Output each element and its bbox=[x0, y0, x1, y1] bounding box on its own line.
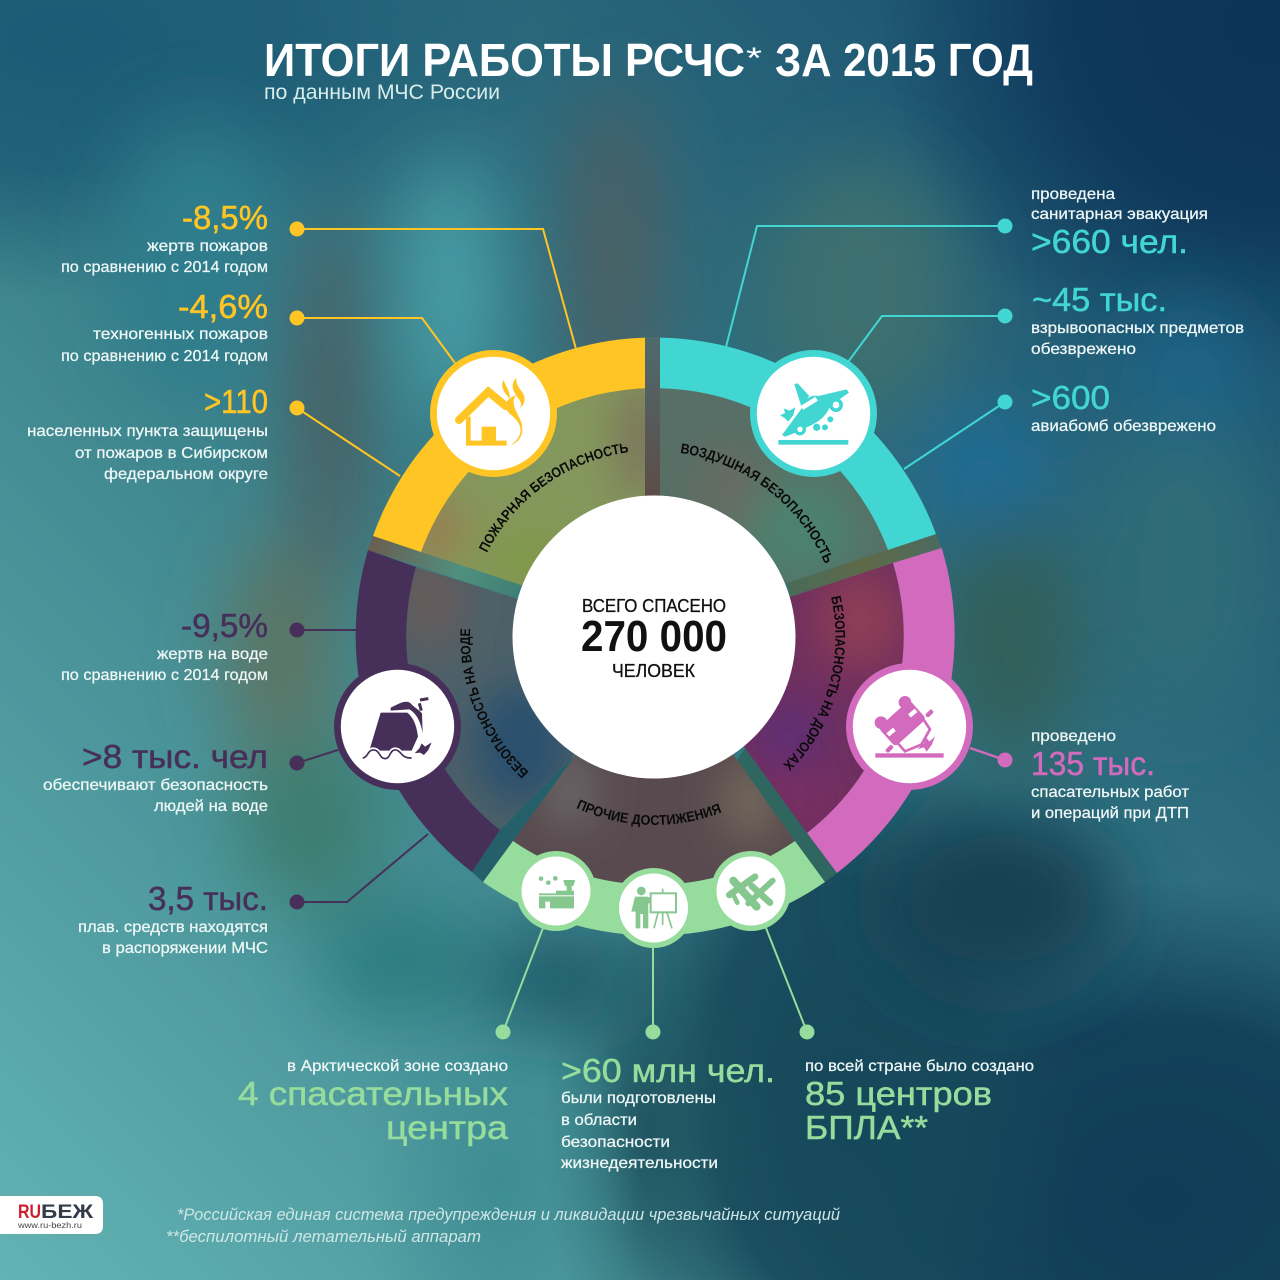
subtitle: по данным МЧС России bbox=[264, 81, 500, 104]
curved label: ВОЗДУШНАЯ БЕЗОПАСНОСТЬ bbox=[680, 444, 832, 563]
text block: UAV centres: по всей стране было создано bbox=[805, 1058, 1034, 1075]
text block: road stats bbox=[1031, 728, 1190, 822]
footnotes bbox=[166, 1205, 841, 1246]
logo: RUБЕЖ: www.ru-bezh.ru bbox=[17, 1220, 82, 1230]
text block: air stats: >600 bbox=[1031, 379, 1110, 416]
logo: RUБЕЖ: RU bbox=[18, 1202, 41, 1223]
icon: crashing plane bbox=[750, 350, 877, 477]
text block: people trained bbox=[561, 1052, 775, 1172]
sector tint: road safety bbox=[744, 563, 904, 833]
gap between road and other sectors bbox=[737, 748, 837, 882]
text block: people trained: жизнедеятельности bbox=[561, 1155, 718, 1172]
text block: road stats: 135 тыс. bbox=[1031, 745, 1155, 782]
leader dots: other bbox=[496, 1024, 814, 1040]
icon: ship and iceberg bbox=[334, 663, 461, 790]
title bbox=[264, 34, 1033, 86]
leader lines: water bbox=[297, 630, 428, 902]
centre circle: total rescued: 270 000 bbox=[581, 612, 727, 661]
footnotes: *Российская единая система предупреждения и ликвидации чрезвычайных ситуаций bbox=[177, 1205, 841, 1224]
icon: overturned car bbox=[846, 663, 973, 790]
text block: air stats: обезврежено bbox=[1031, 341, 1136, 358]
curved label: БЕЗОПАСНОСТЬ НА ДОРОГАХ bbox=[783, 596, 846, 771]
text block: water stats: в распоряжении МЧС bbox=[102, 940, 268, 957]
text block: arctic centres: 4 спасательных bbox=[238, 1075, 509, 1112]
text block: fire stats: по сравнению с 2014 годом bbox=[61, 348, 268, 365]
text block: water stats: 3,5 тыс. bbox=[148, 880, 268, 917]
leader line and dot: roads bbox=[970, 748, 1012, 768]
panel: road safety bbox=[783, 548, 973, 873]
panel: water safety bbox=[334, 550, 528, 872]
centre circle: total rescued: ВСЕГО СПАСЕНО bbox=[582, 596, 726, 616]
text block: people trained: >60 млн чел. bbox=[561, 1052, 775, 1089]
text block: fire stats: федеральном округе bbox=[104, 466, 268, 483]
centre circle: total rescued bbox=[512, 496, 796, 778]
text block: fire stats: по сравнению с 2014 годом bbox=[61, 259, 268, 276]
text block: fire stats: от пожаров в Сибирском bbox=[75, 445, 268, 462]
text block: fire stats bbox=[27, 199, 268, 483]
text block: people trained: безопасности bbox=[561, 1134, 670, 1151]
leader dots: air bbox=[998, 218, 1012, 410]
title: * bbox=[746, 42, 762, 75]
leader lines: fire bbox=[297, 229, 576, 476]
gap between fire and water sectors bbox=[368, 536, 521, 598]
curved label: ПОЖАРНАЯ БЕЗОПАСНОСТЬ bbox=[478, 444, 628, 552]
text block: fire stats: населенных пункта защищены bbox=[27, 423, 268, 440]
text block: road stats: проведено bbox=[1031, 728, 1116, 745]
leader dots: fire bbox=[290, 222, 304, 416]
text block: water stats: обеспечивают безопасность bbox=[43, 777, 268, 794]
text block: water stats bbox=[43, 607, 268, 957]
panel: air safety bbox=[660, 338, 936, 563]
text block: UAV centres bbox=[805, 1058, 1034, 1146]
icon: instructor at easel bbox=[614, 868, 694, 948]
text block: air stats: авиабомб обезврежено bbox=[1031, 418, 1216, 435]
centre circle: total rescued: ЧЕЛОВЕК bbox=[612, 661, 695, 681]
title: ЗА 2015 ГОД bbox=[775, 34, 1033, 86]
text block: fire stats: >110 bbox=[204, 383, 268, 420]
icon: drones bbox=[711, 851, 791, 931]
sector tint: water safety bbox=[406, 567, 575, 830]
band bbox=[373, 338, 645, 552]
band bbox=[483, 841, 825, 936]
text block: fire stats: -4,6% bbox=[178, 288, 268, 325]
logo: RUБЕЖ bbox=[0, 1196, 103, 1234]
band bbox=[807, 548, 955, 873]
curved label: БЕЗОПАСНОСТЬ НА ВОДЕ bbox=[460, 628, 528, 778]
text block: road stats: спасательных работ bbox=[1031, 784, 1190, 801]
text block: air stats: ~45 тыс. bbox=[1032, 281, 1167, 318]
panel: fire safety bbox=[373, 338, 645, 552]
band bbox=[356, 550, 500, 872]
text block: water stats: по сравнению с 2014 годом bbox=[61, 667, 268, 684]
logo: RUБЕЖ: БЕЖ bbox=[41, 1202, 94, 1223]
icon: arctic rescue centre bbox=[516, 851, 596, 931]
text block: air stats: санитарная эвакуация bbox=[1031, 206, 1208, 223]
panel: other achievements bbox=[483, 800, 825, 948]
gap between water and other sectors bbox=[472, 757, 573, 882]
text block: fire stats: жертв пожаров bbox=[147, 238, 268, 255]
sector tint: other achievements bbox=[513, 754, 795, 883]
band bbox=[660, 338, 936, 550]
icon: burning house bbox=[430, 350, 557, 477]
leader lines: air bbox=[726, 226, 1005, 469]
sector tint: fire safety bbox=[421, 388, 645, 586]
text block: UAV centres: 85 центров bbox=[805, 1075, 992, 1112]
text block: air stats: >660 чел. bbox=[1031, 223, 1188, 260]
text block: fire stats: -8,5% bbox=[182, 199, 268, 236]
leader lines: other bbox=[503, 928, 807, 1032]
text block: water stats: плав. средств находятся bbox=[78, 919, 268, 936]
footnotes: **беспилотный летательный аппарат bbox=[166, 1227, 481, 1246]
gap between fire and air sectors bbox=[645, 337, 660, 507]
text block: road stats: и операций при ДТП bbox=[1031, 805, 1189, 822]
title: ИТОГИ РАБОТЫ РСЧС bbox=[264, 34, 745, 86]
sector tint: air safety bbox=[660, 388, 888, 584]
text block: arctic centres: в Арктической зоне создано bbox=[287, 1058, 508, 1075]
text block: water stats: -9,5% bbox=[181, 607, 268, 644]
text block: arctic centres: центра bbox=[386, 1109, 509, 1146]
text block: water stats: жертв на воде bbox=[157, 646, 268, 663]
text block: people trained: в области bbox=[561, 1112, 637, 1129]
curved label: ПРОЧИЕ ДОСТИЖЕНИЯ bbox=[576, 800, 722, 828]
text block: UAV centres: БПЛА** bbox=[805, 1109, 928, 1146]
text block: air stats: взрывоопасных предметов bbox=[1031, 320, 1244, 337]
text block: people trained: были подготовлены bbox=[561, 1090, 716, 1107]
text block: arctic centres bbox=[238, 1058, 509, 1146]
text block: fire stats: техногенных пожаров bbox=[93, 326, 268, 343]
text block: water stats: >8 тыс. чел bbox=[82, 738, 268, 775]
text block: water stats: людей на воде bbox=[154, 798, 268, 815]
text block: air stats: проведена bbox=[1031, 186, 1115, 203]
text block: air stats bbox=[1031, 186, 1244, 435]
leader dots: water bbox=[290, 622, 304, 910]
gap between air and road sectors bbox=[787, 534, 942, 597]
